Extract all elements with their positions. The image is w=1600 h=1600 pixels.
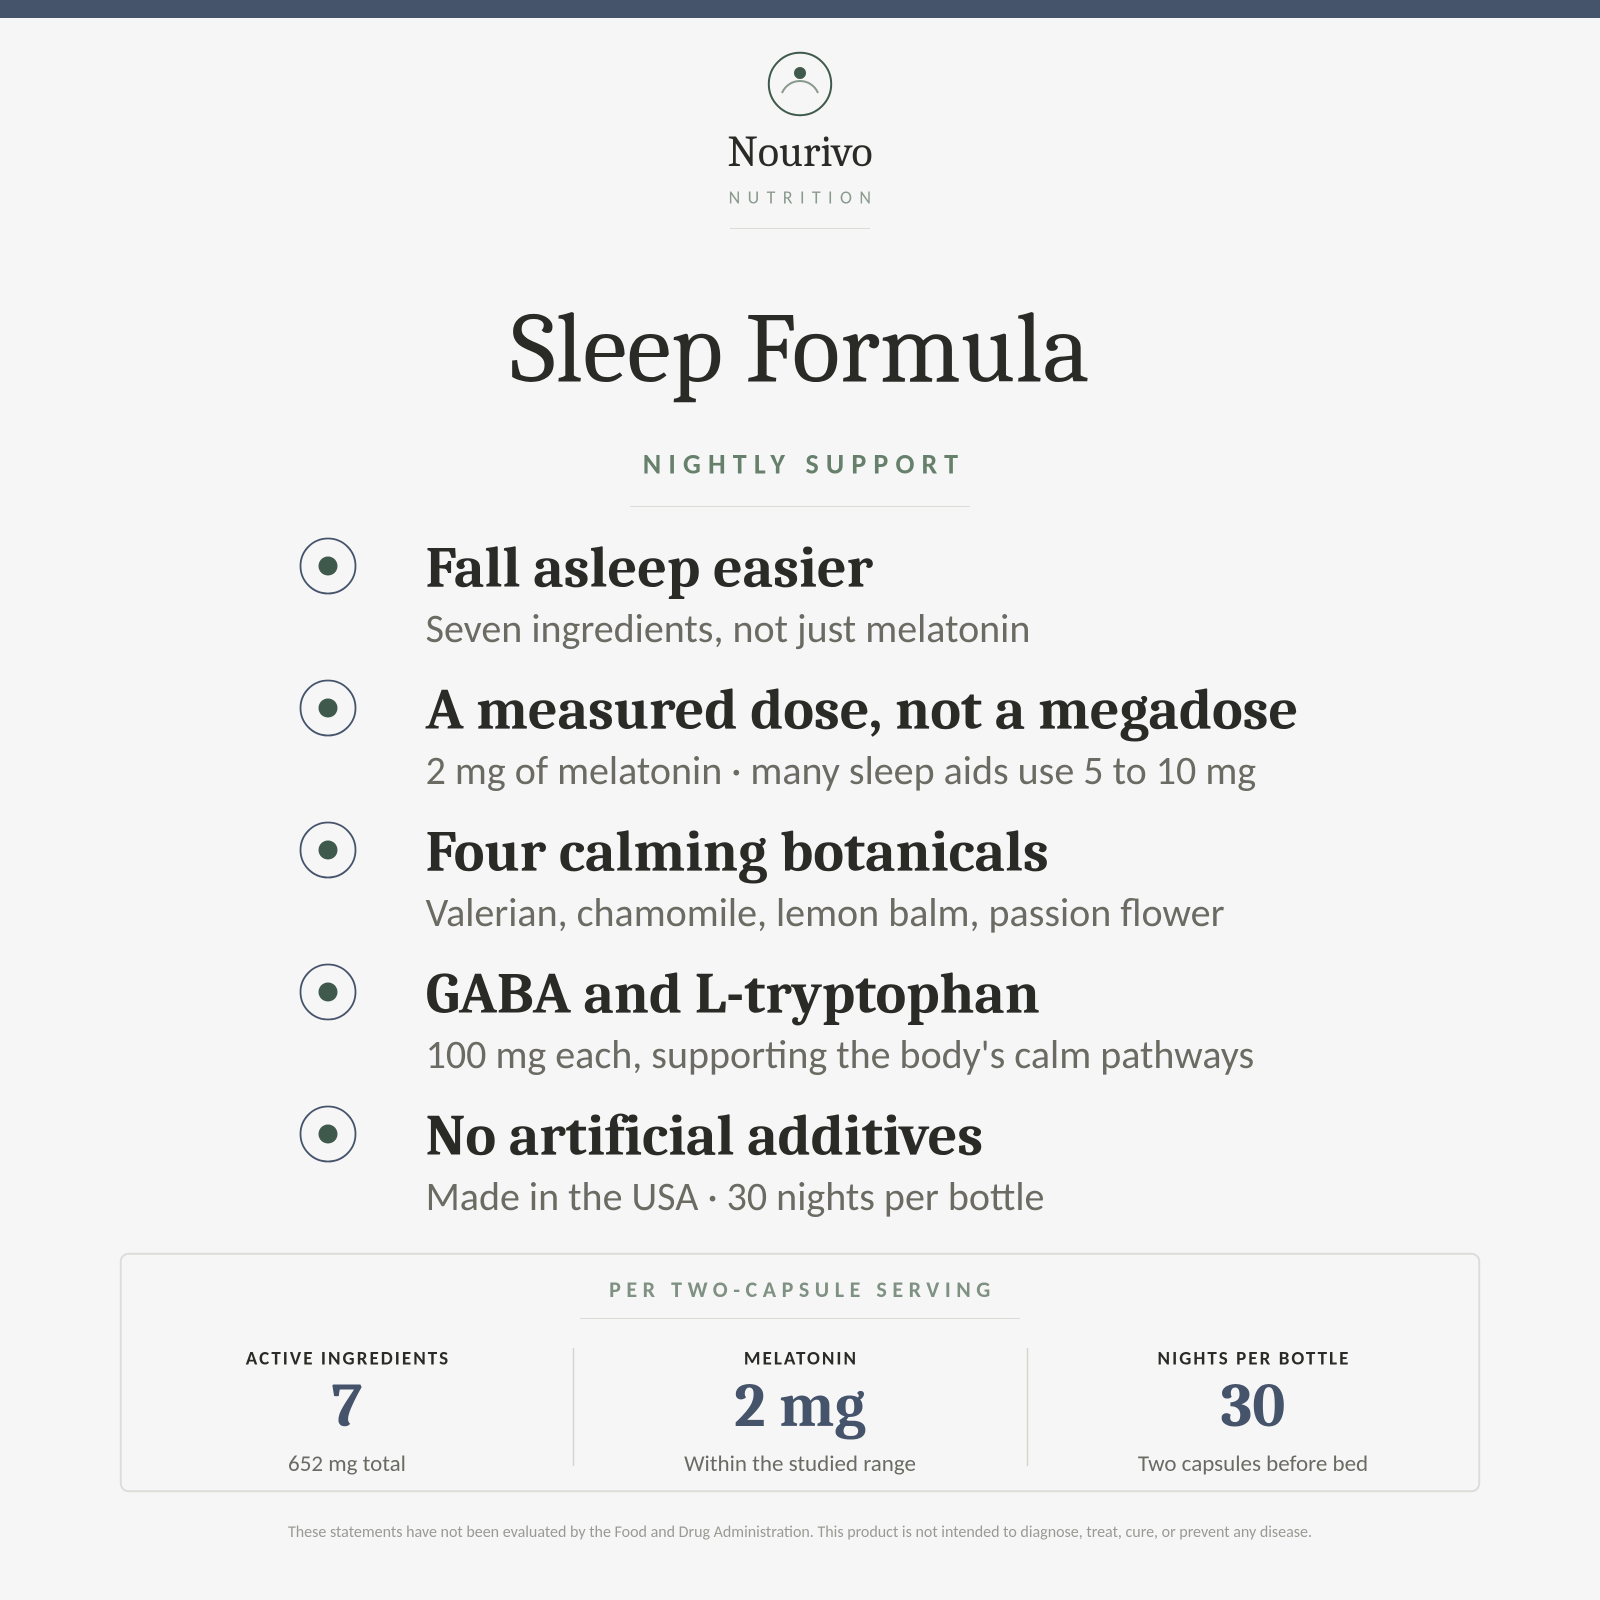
stat: nights per bottle: 30 — [1221, 1370, 1285, 1442]
benefit detail: Made in the USA · 30 nights per bottle — [426, 1172, 1044, 1221]
icon: bullet — [300, 538, 356, 594]
benefit 1 — [300, 534, 1030, 653]
panel heading: PER TWO-CAPSULE SERVING — [609, 1276, 996, 1303]
benefit heading: GABA and L-tryptophan — [426, 960, 1040, 1028]
stat: active ingredients: ACTIVE INGREDIENTS — [246, 1348, 450, 1370]
icon: bullet — [300, 822, 356, 878]
panel frame — [121, 1254, 1479, 1491]
stat: active ingredients: 652 mg total — [288, 1450, 406, 1478]
benefit heading: Fall asleep easier — [426, 534, 874, 602]
benefit 5 — [300, 1102, 1044, 1221]
benefit 2 — [300, 676, 1298, 795]
benefit heading: Four calming botanicals — [426, 818, 1049, 886]
top bar — [0, 0, 1600, 18]
stat: active ingredients — [246, 1348, 450, 1478]
benefit 3 — [300, 818, 1225, 937]
stat: melatonin: 2 mg — [734, 1370, 866, 1442]
benefit heading: A measured dose, not a megadose — [425, 676, 1298, 744]
brand name: Nourivo — [727, 126, 873, 177]
stat: melatonin: MELATONIN — [744, 1348, 858, 1370]
stat: melatonin — [684, 1348, 916, 1478]
stat: nights per bottle: NIGHTS PER BOTTLE — [1158, 1348, 1350, 1370]
benefit detail: 2 mg of melatonin · many sleep aids use 5 to 10 mg — [426, 746, 1256, 795]
subtitle: NIGHTLY SUPPORT — [643, 446, 965, 482]
panel: serving facts — [121, 1254, 1479, 1491]
benefit detail: Seven ingredients, not just melatonin — [426, 604, 1030, 653]
title: Sleep Formula — [510, 292, 1090, 406]
benefit 4 — [300, 960, 1254, 1079]
stat: melatonin: Within the studied range — [684, 1450, 916, 1478]
icon: bullet — [300, 1106, 356, 1162]
icon: bullet — [300, 680, 356, 736]
brand sub-name: NUTRITION — [729, 186, 878, 208]
disclaimer: These statements have not been evaluated by the Food and Drug Administration. This product is not intended to diagnose, treat, cure, or prevent any disease. — [288, 1523, 1312, 1542]
benefit detail: Valerian, chamomile, lemon balm, passion flower — [426, 888, 1225, 937]
stat: nights per bottle — [1138, 1348, 1368, 1478]
benefit detail: 100 mg each, supporting the body's calm pathways — [426, 1030, 1254, 1079]
icon: bullet — [300, 964, 356, 1020]
benefit heading: No artificial additives — [426, 1102, 983, 1170]
stat: active ingredients: 7 — [332, 1370, 363, 1442]
brand logo lockup — [727, 53, 878, 208]
stat: nights per bottle: Two capsules before bed — [1138, 1450, 1368, 1478]
icon: logo circle — [769, 53, 831, 115]
